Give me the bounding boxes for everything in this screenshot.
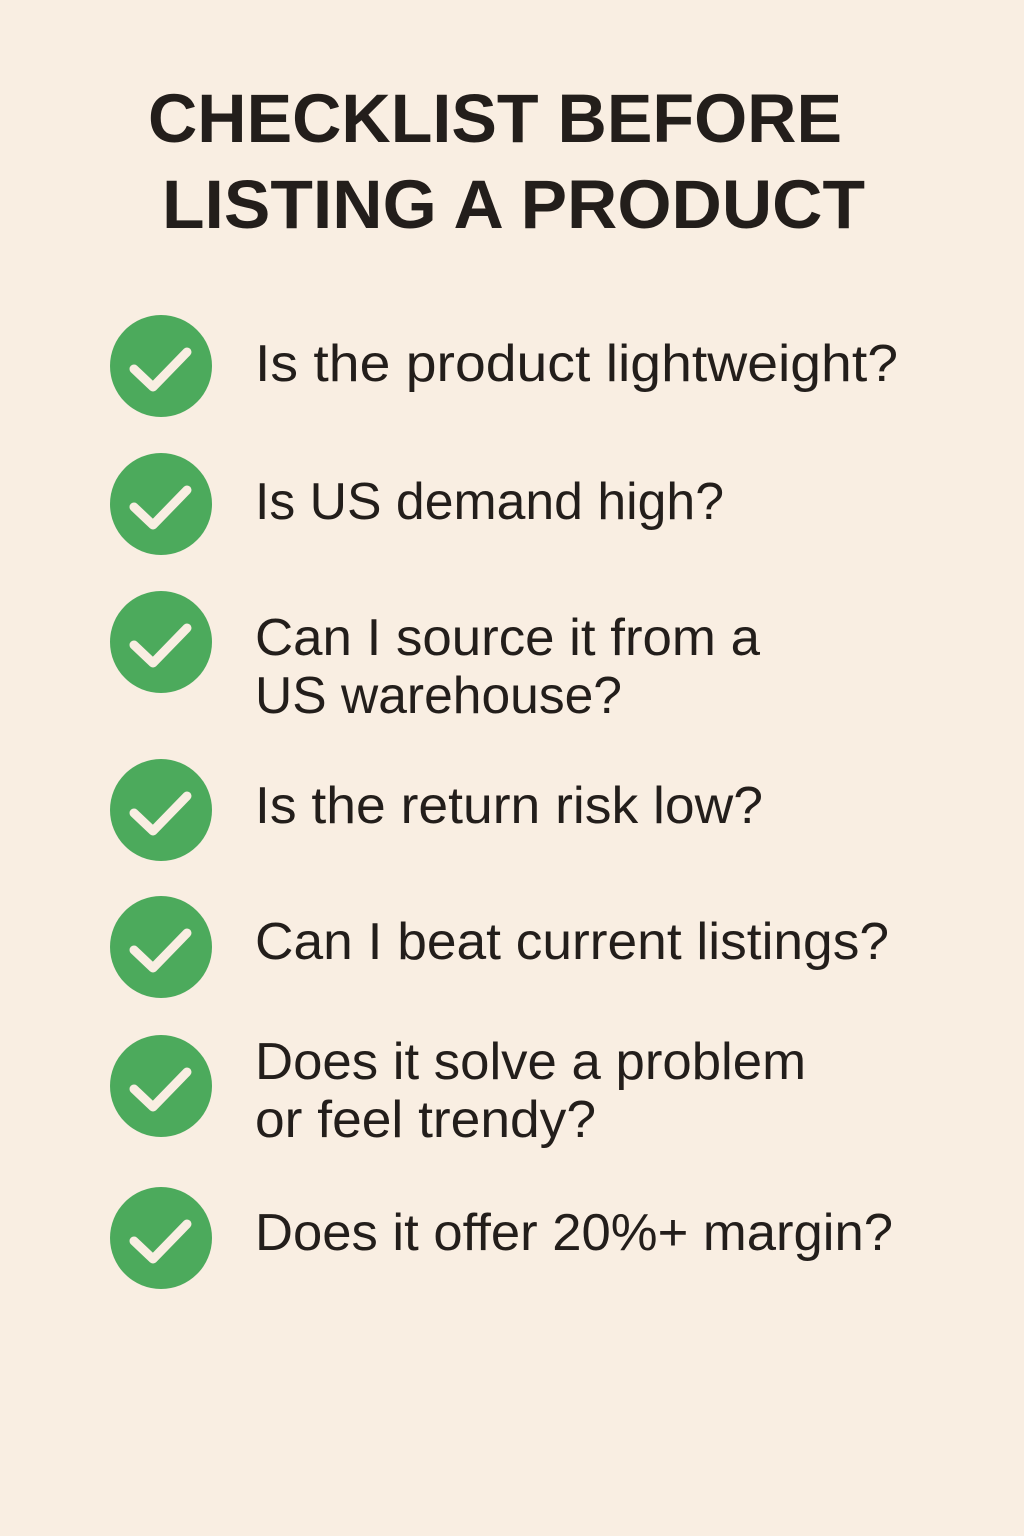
title: LISTING A PRODUCT xyxy=(162,166,865,243)
title xyxy=(148,80,865,243)
title: CHECKLIST BEFORE xyxy=(148,80,842,157)
item 5: Can I beat current listings? xyxy=(255,913,889,971)
item 6: Does it solve a problem xyxy=(255,1033,806,1091)
item 5 xyxy=(110,896,889,998)
item 6 xyxy=(110,1033,806,1149)
item 4: Is the return risk low? xyxy=(255,777,763,835)
item 7 xyxy=(110,1187,893,1289)
item 4 xyxy=(110,759,763,861)
item 3: Can I source it from a xyxy=(255,609,760,667)
item 1 xyxy=(110,315,898,417)
item 3 xyxy=(110,591,760,725)
item 2 xyxy=(110,453,724,555)
item 1: Is the product lightweight? xyxy=(255,335,898,393)
item 7: Does it offer 20%+ margin? xyxy=(255,1204,893,1262)
item 6: or feel trendy? xyxy=(255,1091,596,1149)
item 3: US warehouse? xyxy=(255,667,622,725)
checklist xyxy=(110,315,898,1289)
item 2: Is US demand high? xyxy=(255,473,724,531)
